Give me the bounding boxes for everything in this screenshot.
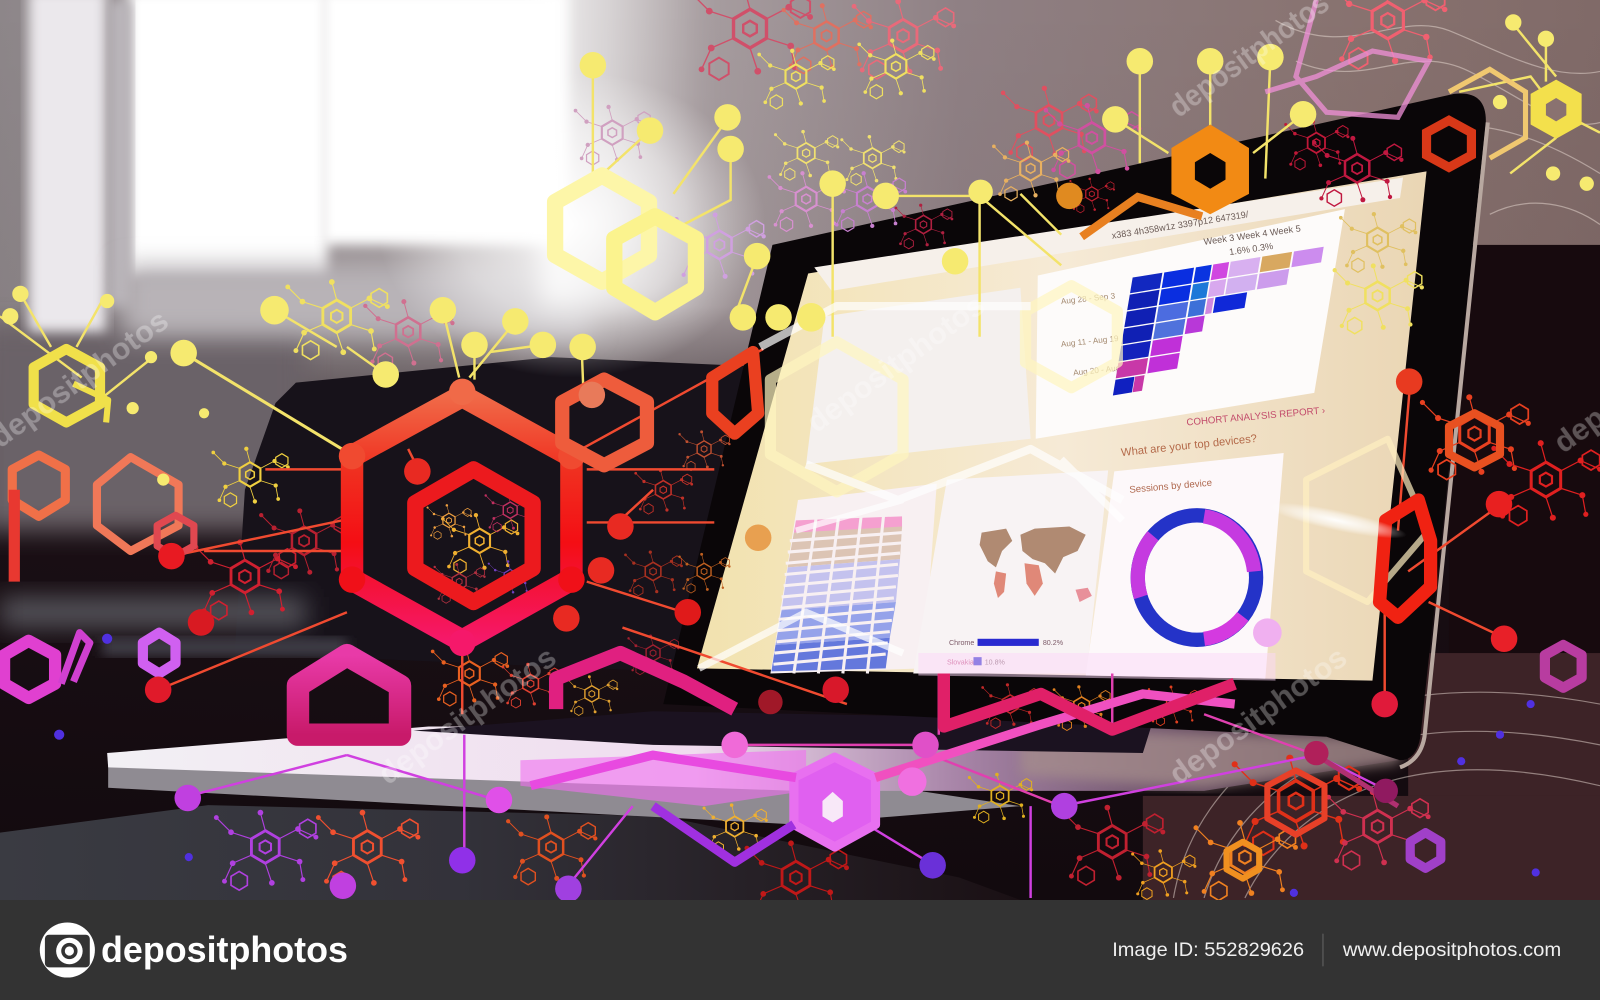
- watermarks: depositphotos: [372, 640, 562, 791]
- hexagon: bright yellow cluster: [555, 176, 696, 312]
- hexagon: left yellow: [34, 349, 108, 422]
- website: www.depositphotos.com: [1342, 939, 1561, 961]
- hexagons: left coral and magenta: [4, 455, 194, 698]
- watermarks: depositphotos: [1163, 640, 1353, 791]
- separator: [1322, 934, 1323, 966]
- hexagon: large red: [339, 379, 585, 656]
- scattered tiny dots: [54, 634, 1540, 897]
- panel: world map: 10.8%: [985, 658, 1006, 666]
- lid edge highlight: [1400, 122, 1488, 767]
- keyboard: [413, 711, 1153, 753]
- depositphotos logo icon: [40, 922, 95, 978]
- row labels: [1061, 293, 1118, 376]
- network: yellow connection lines: [0, 20, 1600, 449]
- hexagon: bottom-left pink: [298, 655, 400, 735]
- hexagon: upper-right coral: [562, 380, 647, 465]
- donut chart: [1138, 515, 1256, 640]
- reflective band on base right: [1020, 731, 1408, 788]
- watermarks: [0, 0, 1600, 791]
- row labels: Aug 11 - Aug 19: [1060, 334, 1119, 349]
- hexagon: inner red: [415, 469, 533, 602]
- hexagon: top-right yellow: [1449, 69, 1582, 158]
- orbit lines: [1173, 20, 1600, 898]
- hexagon: dark orange top right: [1427, 120, 1471, 167]
- browser address bar: [814, 178, 1403, 291]
- map legend bar: [978, 639, 1039, 646]
- image id: Image ID: 552829626: [1112, 939, 1304, 961]
- URL text: x383 4h358w1z 3397p12 647319/: [1111, 209, 1250, 241]
- laptop: [107, 93, 1488, 824]
- base glare: [520, 750, 806, 806]
- laptop screen: [697, 171, 1427, 681]
- section heading: top devices: What are your top devices?: [1120, 433, 1258, 459]
- hexagon: orange: [1082, 124, 1249, 237]
- nodes: orange and red: [145, 183, 1517, 803]
- nodes: magenta and violet: [174, 618, 1282, 902]
- network: red and magenta connection lines: [158, 349, 1504, 898]
- heat table grid: [771, 516, 902, 671]
- hexagon: red at lid edge: [712, 352, 758, 434]
- logo wordmark: depositphotos: [101, 930, 348, 970]
- hexagons: screen overlay: [699, 286, 1429, 668]
- laptop base top: [107, 727, 1413, 791]
- bright window: [29, 0, 765, 378]
- footer bar: [0, 900, 1600, 1000]
- panel: world map: [913, 470, 1108, 673]
- row labels: Aug 28 - Sep 3: [1060, 291, 1116, 306]
- panel: world map: 80.2%: [1043, 639, 1064, 647]
- panel: cohort table: [1036, 209, 1345, 439]
- screen lower glare: [918, 653, 1276, 681]
- panel label: Sessions by device: [1129, 478, 1212, 496]
- lens flare: [1265, 496, 1409, 545]
- panel: left table: [806, 288, 1031, 464]
- panel: sessions heat table: [770, 484, 937, 673]
- column labels: Week 3 Week 4 Week 5: [1203, 223, 1301, 247]
- cohort report link: COHORT ANALYSIS REPORT ›: [1186, 405, 1326, 428]
- hexagons: right lower: [1227, 413, 1582, 879]
- hexagon: right red: [1380, 500, 1431, 617]
- hexagon: top pink network: [1265, 0, 1429, 117]
- cohort heatmap: [1113, 247, 1324, 395]
- nodes: yellow: [2, 14, 1594, 486]
- panel: world map: Chrome: [949, 639, 974, 647]
- laptop lid bezel: [663, 93, 1486, 760]
- panel: cohort table: 1.6% 0.3%: [1228, 241, 1274, 257]
- row labels: Aug 20 - Aug 26: [1073, 362, 1132, 377]
- watermarks: depositphotos: [800, 288, 991, 439]
- panel: sessions by device: [1086, 453, 1284, 679]
- hexagon: center pink: [556, 653, 735, 709]
- laptop base front edge: [108, 760, 1020, 824]
- map continents: [980, 527, 1092, 602]
- panel: world map: Slovakia: [947, 658, 974, 666]
- hexagon: pink base row: [531, 673, 1235, 862]
